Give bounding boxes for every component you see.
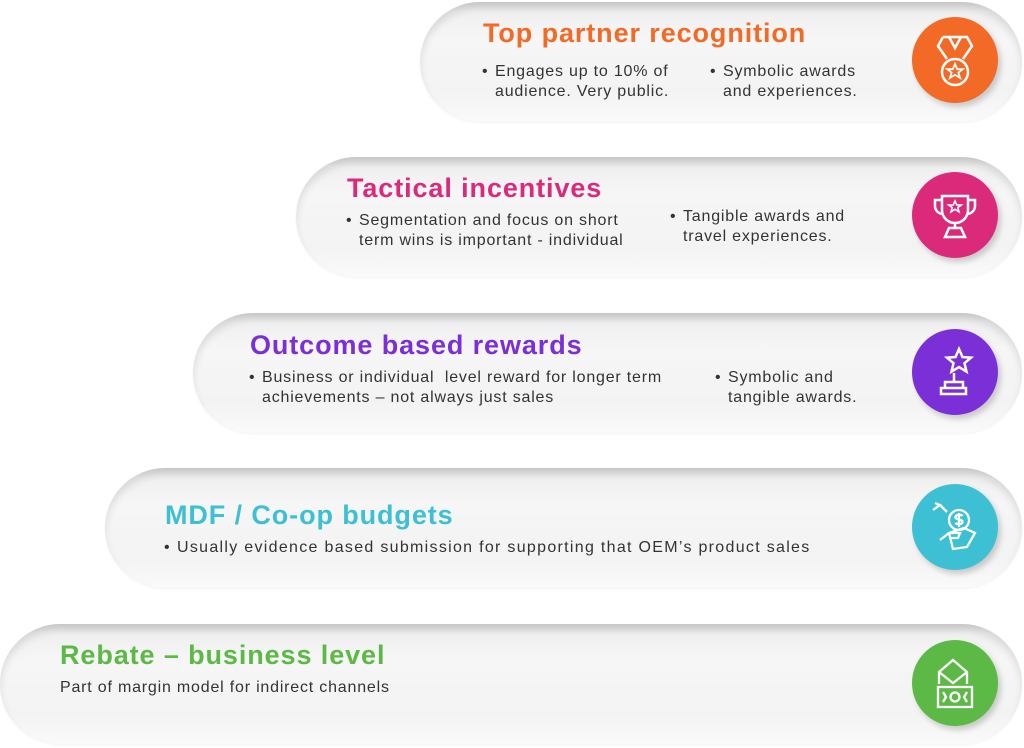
text: bullet 2b (670, 208, 845, 245)
text: bullet 1a: • (482, 63, 488, 80)
text: bullet 1b: Symbolic awards (723, 63, 856, 80)
title: rebate: Rebate – business level (60, 640, 385, 670)
text: bullet 3a: Business or individual level reward for longer term (262, 369, 662, 386)
title: outcome based rewards: Outcome based rewards (250, 330, 583, 360)
icon: trophy (912, 172, 998, 258)
text: bullet 1b: • (710, 63, 716, 80)
text: bullet 3b: Symbolic and (728, 369, 834, 386)
text: bullet 1b (710, 63, 858, 100)
icon: money envelope (912, 640, 998, 726)
text: rebate description: Part of margin model for indirect channels (60, 679, 390, 696)
icon: medal (912, 17, 998, 103)
text: bullet 3a: achievements – not always just sales (262, 389, 554, 406)
icon: star award (912, 329, 998, 415)
title: MDF co-op budgets: MDF / Co-op budgets (165, 500, 454, 530)
text: bullet 4: Usually evidence based submission for supporting that OEM’s product sales (177, 539, 811, 556)
text: bullet 4: • (164, 539, 171, 556)
text: bullet 3b: • (715, 369, 721, 386)
icon: money hand (912, 484, 998, 570)
text: bullet 2a: term wins is important - individual (359, 232, 624, 249)
text: bullet 2b: travel experiences. (683, 228, 832, 245)
panel: rebate (0, 624, 1022, 744)
title: top partner recognition: Top partner recognition (483, 18, 806, 48)
title: tactical incentives: Tactical incentives (347, 173, 602, 203)
text: bullet 1a: Engages up to 10% of (495, 63, 668, 80)
panel: MDF co-op budgets (105, 468, 1022, 588)
text: bullet 2a: Segmentation and focus on short (359, 212, 619, 229)
text: bullet 2b: • (670, 208, 676, 225)
text: bullet 2a (346, 212, 624, 249)
text: bullet 1b: and experiences. (723, 83, 858, 100)
text: bullet 3b: tangible awards. (728, 389, 857, 406)
text: bullet 1a (482, 63, 669, 100)
panel: tactical incentives (296, 157, 1022, 277)
text: bullet 1a: audience. Very public. (495, 83, 669, 100)
text: bullet 3a (249, 369, 662, 406)
panel: top partner recognition (420, 2, 1022, 122)
text: bullet 3a: • (249, 369, 255, 386)
text: bullet 2b: Tangible awards and (683, 208, 845, 225)
text: bullet 3b (715, 369, 857, 406)
text: bullet 2a: • (346, 212, 352, 229)
panel: outcome based rewards (193, 313, 1022, 433)
